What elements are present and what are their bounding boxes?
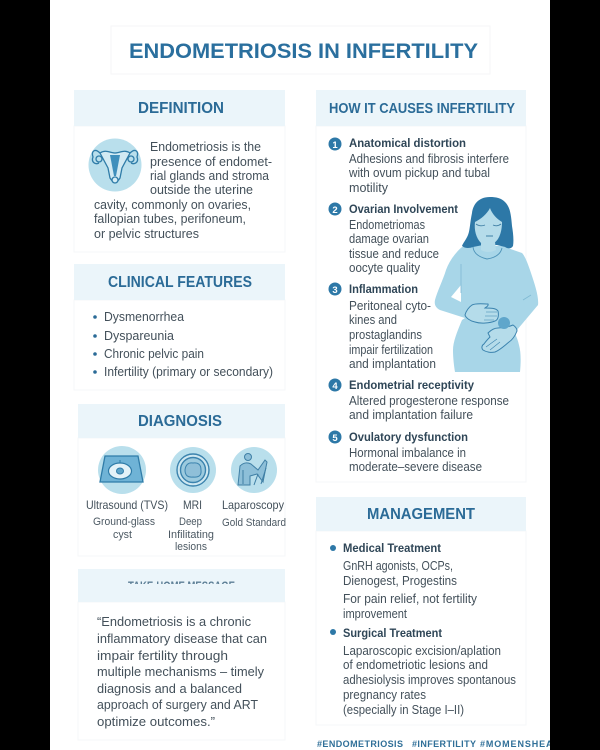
panel: clinical features xyxy=(74,264,285,390)
panel: summary quote xyxy=(78,569,285,740)
definition text: or pelvic structures xyxy=(94,227,199,241)
cause 2: ovarian involvement: 2 xyxy=(332,205,338,216)
surgical treatment: (especially in Stage I–II) xyxy=(343,703,464,717)
surgical treatment: Laparoscopic excision/aplation xyxy=(343,644,501,658)
diagnosis labels: Laparoscopy xyxy=(222,498,284,512)
cause 3: inflammation: kines and xyxy=(349,313,397,327)
cause 3: inflammation: prostaglandins xyxy=(349,328,422,342)
icon: uterus xyxy=(88,138,142,192)
diagnosis labels: cyst xyxy=(113,529,132,541)
hashtags xyxy=(317,740,550,747)
cause 1: anatomical distortion: motility xyxy=(349,181,389,195)
cause 4: endometrial receptivity xyxy=(328,378,509,422)
hashtags: #MOMENSHEALTH xyxy=(480,739,572,749)
diagnosis labels xyxy=(86,498,286,553)
cause 2: ovarian involvement: Endometriomas xyxy=(349,218,425,232)
panel: definition xyxy=(74,90,285,252)
icon: laparoscopy xyxy=(231,447,277,493)
diagnosis labels: Infilitating xyxy=(168,529,214,541)
medical treatment xyxy=(330,541,478,621)
quote text: impair fertility through xyxy=(97,648,228,663)
heading: definition: DEFINITION xyxy=(138,100,224,117)
symptom list xyxy=(93,310,273,379)
cause 4: endometrial receptivity: and implantation failure xyxy=(349,408,473,422)
cause 1: anatomical distortion xyxy=(328,136,509,195)
cause 3: inflammation xyxy=(328,282,436,371)
definition text: outside the uterine xyxy=(150,183,253,197)
surgical treatment: pregnancy rates xyxy=(343,688,426,702)
symptom list: Dyspareunia xyxy=(104,329,174,343)
panel: diagnosis xyxy=(78,404,286,556)
definition text: Endometriosis is the xyxy=(150,140,261,154)
medical treatment: For pain relief, not fertility xyxy=(343,592,478,606)
cause 1: anatomical distortion: 1 xyxy=(332,140,338,151)
cause 5: ovulatory dysfunction xyxy=(328,430,482,474)
heading: clinical features: CLINICAL FEATURES xyxy=(108,274,252,291)
heading: how it causes infertility xyxy=(316,90,526,126)
cause 2: ovarian involvement xyxy=(328,202,458,275)
heading: management xyxy=(316,497,526,531)
symptom list: Chronic pelvic pain xyxy=(104,347,204,361)
medical treatment: Medical Treatment xyxy=(343,541,441,555)
cause 5: ovulatory dysfunction: Ovulatory dysfunction xyxy=(349,430,468,444)
medical treatment: Dienogest, Progestins xyxy=(343,574,457,588)
diagnosis labels: Ultrasound (TVS) xyxy=(86,498,168,512)
cause 3: inflammation: Inflammation xyxy=(349,282,418,296)
heading: how it causes infertility: HOW IT CAUSES INFERTILITY xyxy=(329,101,515,117)
title: ENDOMETRIOSIS IN INFERTILITY xyxy=(129,39,478,63)
cause 2: ovarian involvement: oocyte quality xyxy=(349,261,421,275)
cause 3: inflammation: impair fertilization xyxy=(349,343,433,357)
cause 1: anatomical distortion: with ovum pickup and tubal xyxy=(348,166,490,180)
quote text xyxy=(97,614,267,729)
heading: management: MANAGEMENT xyxy=(367,506,475,523)
diagnosis labels: lesions xyxy=(175,541,207,553)
symptom list: Dysmenorrhea xyxy=(104,310,184,324)
icon: ultrasound xyxy=(98,446,146,494)
definition text: cavity, commonly on ovaries, xyxy=(94,198,251,212)
definition text: rial glands and stroma xyxy=(150,169,269,183)
heading: diagnosis: DIAGNOSIS xyxy=(138,413,222,430)
medical treatment: improvement xyxy=(343,607,407,621)
heading: clipped quote header: TAKE-HOME MESSAGE xyxy=(128,579,235,593)
quote text: multiple mechanisms – timely xyxy=(97,664,264,679)
quote text: approach of surgery and ART xyxy=(97,697,258,712)
quote text: optimize outcomes.” xyxy=(97,714,215,729)
heading: clinical features xyxy=(74,264,285,300)
cause 4: endometrial receptivity: Altered progesterone response xyxy=(349,394,509,408)
diagnosis labels: Gold Standard xyxy=(222,517,286,529)
diagnosis labels: MRI xyxy=(183,498,202,512)
cause 3: inflammation: and implantation xyxy=(349,357,436,371)
quote text: inflammatory disease that can xyxy=(97,631,267,646)
definition text: fallopian tubes, perifoneum, xyxy=(94,212,246,226)
cause 5: ovulatory dysfunction: Hormonal imbalance in xyxy=(349,446,466,460)
definition text xyxy=(94,140,272,241)
title xyxy=(111,26,490,74)
medical treatment: GnRH agonists, OCPs, xyxy=(343,559,453,573)
diagnosis labels: Deep xyxy=(179,516,202,528)
surgical treatment: adhesiolysis improves spontanous xyxy=(343,673,516,687)
icon: mri xyxy=(170,447,216,493)
cause 1: anatomical distortion: Anatomical distortion xyxy=(349,136,466,150)
definition text: presence of endomet- xyxy=(150,155,272,169)
panel: management xyxy=(316,497,526,725)
cause 2: ovarian involvement: tissue and reduce xyxy=(349,247,439,261)
surgical treatment: of endometriotic lesions and xyxy=(343,658,488,672)
cause 3: inflammation: 3 xyxy=(332,285,338,296)
quote text: “Endometriosis is a chronic xyxy=(97,614,251,629)
cause 2: ovarian involvement: damage ovarian xyxy=(349,232,429,246)
surgical treatment xyxy=(330,626,516,717)
illustration: woman holding abdomen xyxy=(435,197,538,372)
cause 5: ovulatory dysfunction: 5 xyxy=(332,433,338,444)
cause 4: endometrial receptivity: Endometrial receptivity xyxy=(349,378,474,392)
cause 1: anatomical distortion: Adhesions and fibrosis interfere xyxy=(349,152,509,166)
heading: diagnosis xyxy=(78,404,285,438)
symptom list: Infertility (primary or secondary) xyxy=(104,365,273,379)
heading: definition xyxy=(74,90,285,126)
panel: how it causes infertility xyxy=(316,90,538,482)
cause 5: ovulatory dysfunction: moderate–severe disease xyxy=(349,460,482,474)
diagnosis labels: Ground-glass xyxy=(93,516,155,528)
quote text: diagnosis and a balanced xyxy=(97,681,242,696)
hashtags: #ENDOMETRIOSIS xyxy=(317,739,403,749)
cause 2: ovarian involvement: Ovarian Involvement xyxy=(349,202,458,216)
heading: clipped quote header xyxy=(78,569,285,602)
cause 3: inflammation: Peritoneal cyto- xyxy=(349,299,431,313)
surgical treatment: Surgical Treatment xyxy=(343,626,442,640)
hashtags: #INFERTILITY xyxy=(412,739,476,749)
cause 4: endometrial receptivity: 4 xyxy=(332,381,338,392)
